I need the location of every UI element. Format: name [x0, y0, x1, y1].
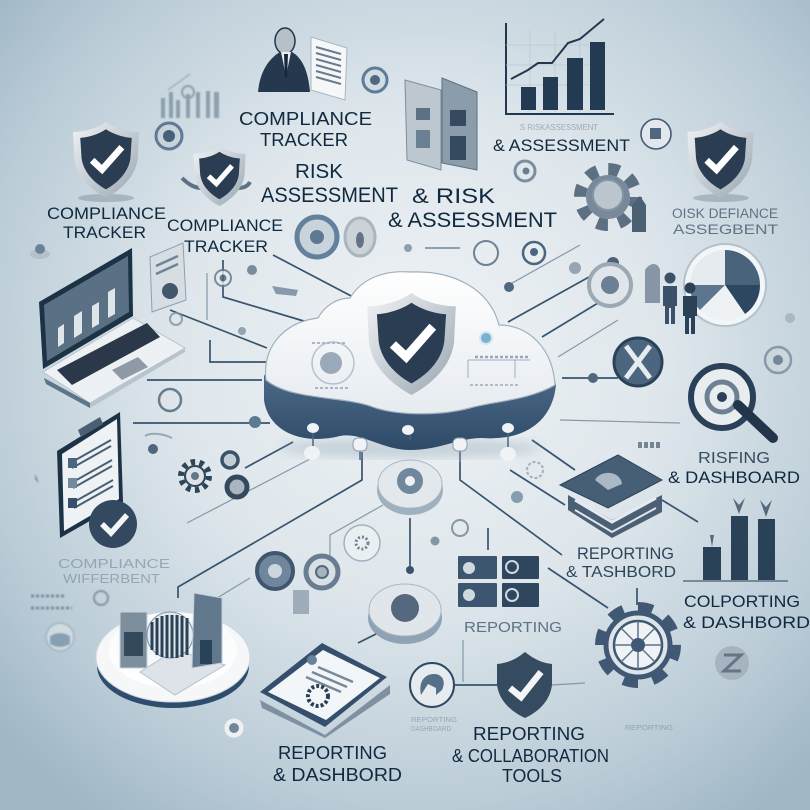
label: risk defiance assessment: ASSEGBENT [673, 222, 778, 237]
label: risk defiance assessment [672, 206, 778, 237]
icon: check badge [89, 500, 137, 548]
heading: risk assessment: RISK [295, 161, 344, 183]
heading: reporting and tashbord: & TASHBORD [566, 564, 676, 581]
central cloud with shield [264, 272, 556, 462]
bar chart right [683, 498, 788, 581]
icon: location pin [224, 718, 244, 738]
heading: and assessment [493, 123, 630, 155]
faded left icons [31, 475, 108, 651]
heading: risfing and dashboard [668, 450, 800, 487]
label: faded compliance: COMPLIANCE [58, 556, 170, 571]
icon: clipboard checklist [57, 412, 123, 538]
cloud body [266, 272, 555, 414]
heading: risk assessment: & ASSESSMENT [388, 209, 557, 232]
disc nodes under cloud [368, 460, 443, 644]
connector network [133, 245, 698, 685]
heading: reporting and collaboration tools [452, 724, 609, 786]
heading: reporting and collaboration tools: TOOLS [502, 766, 562, 786]
label: risk defiance assessment: OISK DEFIANCE [672, 206, 778, 221]
icon: shield right [687, 122, 754, 202]
heading: compliance tracker middle: COMPLIANCE [167, 216, 283, 235]
heading: and assessment: S RISKASSESSMENT [520, 123, 598, 132]
faded bar chart [161, 74, 219, 118]
icon: team gear [580, 169, 646, 232]
heading: reporting and tashbord [566, 544, 676, 581]
icon: large gear [601, 608, 675, 682]
heading: colporting and dashboard: & DASHBORD [683, 613, 810, 632]
heading: risk assessment [261, 161, 557, 232]
heading: and assessment: & ASSESSMENT [493, 136, 630, 155]
heading: reporting and dashbord: REPORTING [278, 743, 387, 763]
icon: two people [663, 272, 697, 334]
heading: compliance tracker middle [167, 216, 283, 256]
label: faded captions: DASHBOARD [411, 726, 451, 733]
heading: reporting and dashbord [273, 743, 402, 785]
label: faded compliance: WIFFERBENT [63, 571, 160, 586]
main shield [367, 293, 456, 395]
heading: compliance tracker top: TRACKER [260, 130, 348, 150]
icon: pie chart [684, 244, 766, 326]
heading: colporting and dashboard [683, 592, 810, 632]
heading: colporting and dashboard: COLPORTING [684, 592, 800, 611]
icon: business person [258, 28, 310, 92]
icon: book stack [560, 455, 662, 538]
icon: outlined circle [641, 119, 671, 149]
heading: compliance tracker middle: TRACKER [184, 237, 268, 256]
heading: compliance tracker left: COMPLIANCE [47, 204, 166, 223]
small satellite icons left [30, 244, 298, 411]
cloud pins [304, 423, 516, 462]
heading: reporting and tashbord: REPORTING [577, 544, 674, 563]
icon: faded x circle [715, 646, 749, 680]
icon: document [311, 37, 347, 100]
dashboard cards [458, 556, 539, 607]
heading: risk assessment: & RISK [412, 185, 495, 208]
icon: eye badge [515, 161, 535, 181]
heading: reporting and dashbord: & DASHBORD [273, 765, 402, 785]
label: reporting center: REPORTING [464, 619, 562, 636]
small icons near books [430, 445, 660, 546]
cloud icons [312, 342, 530, 388]
heading: risfing and dashboard: & DASHBOARD [668, 468, 800, 487]
icon: magnifier target [691, 366, 773, 438]
icon: shield left [73, 122, 139, 202]
icon: head circle [410, 663, 454, 707]
icon: laptop [39, 248, 185, 408]
small satellite icons right [404, 244, 795, 373]
heading: compliance tracker left [47, 204, 166, 242]
heading: reporting and collaboration tools: & COLLABORATION [452, 746, 609, 766]
icons: gears cluster [145, 434, 247, 497]
heading: risk assessment: ASSESSMENT [261, 184, 398, 207]
label: faded captions: REPORTING [625, 725, 673, 732]
icon: small circle top [363, 68, 387, 92]
icon: outline gear circle [344, 525, 380, 561]
icon: circle badge [156, 123, 182, 149]
icon: process node [589, 264, 631, 306]
heading: compliance tracker left: TRACKER [63, 223, 146, 242]
icon: policy folders [405, 78, 477, 170]
icon: crossed circle [614, 338, 662, 386]
icon: compliance sheet [150, 243, 186, 312]
heading: compliance tracker top: COMPLIANCE [239, 109, 372, 129]
icon: shield plain [497, 652, 552, 718]
label: faded captions [411, 717, 673, 733]
heading: compliance tracker top [239, 109, 372, 150]
icon: linked circles [257, 553, 338, 614]
line chart with bars [506, 19, 614, 114]
dashboard plate [96, 593, 250, 708]
label: faded captions: REPORTING [411, 717, 457, 724]
icon: shield middle [182, 146, 250, 206]
icon: circles row [297, 217, 545, 265]
label: faded compliance [58, 556, 170, 586]
heading: risfing and dashboard: RISFING [698, 450, 770, 467]
icon: report booklet [260, 643, 390, 738]
cloud base [264, 365, 556, 450]
heading: reporting and collaboration tools: REPORTING [473, 724, 585, 744]
